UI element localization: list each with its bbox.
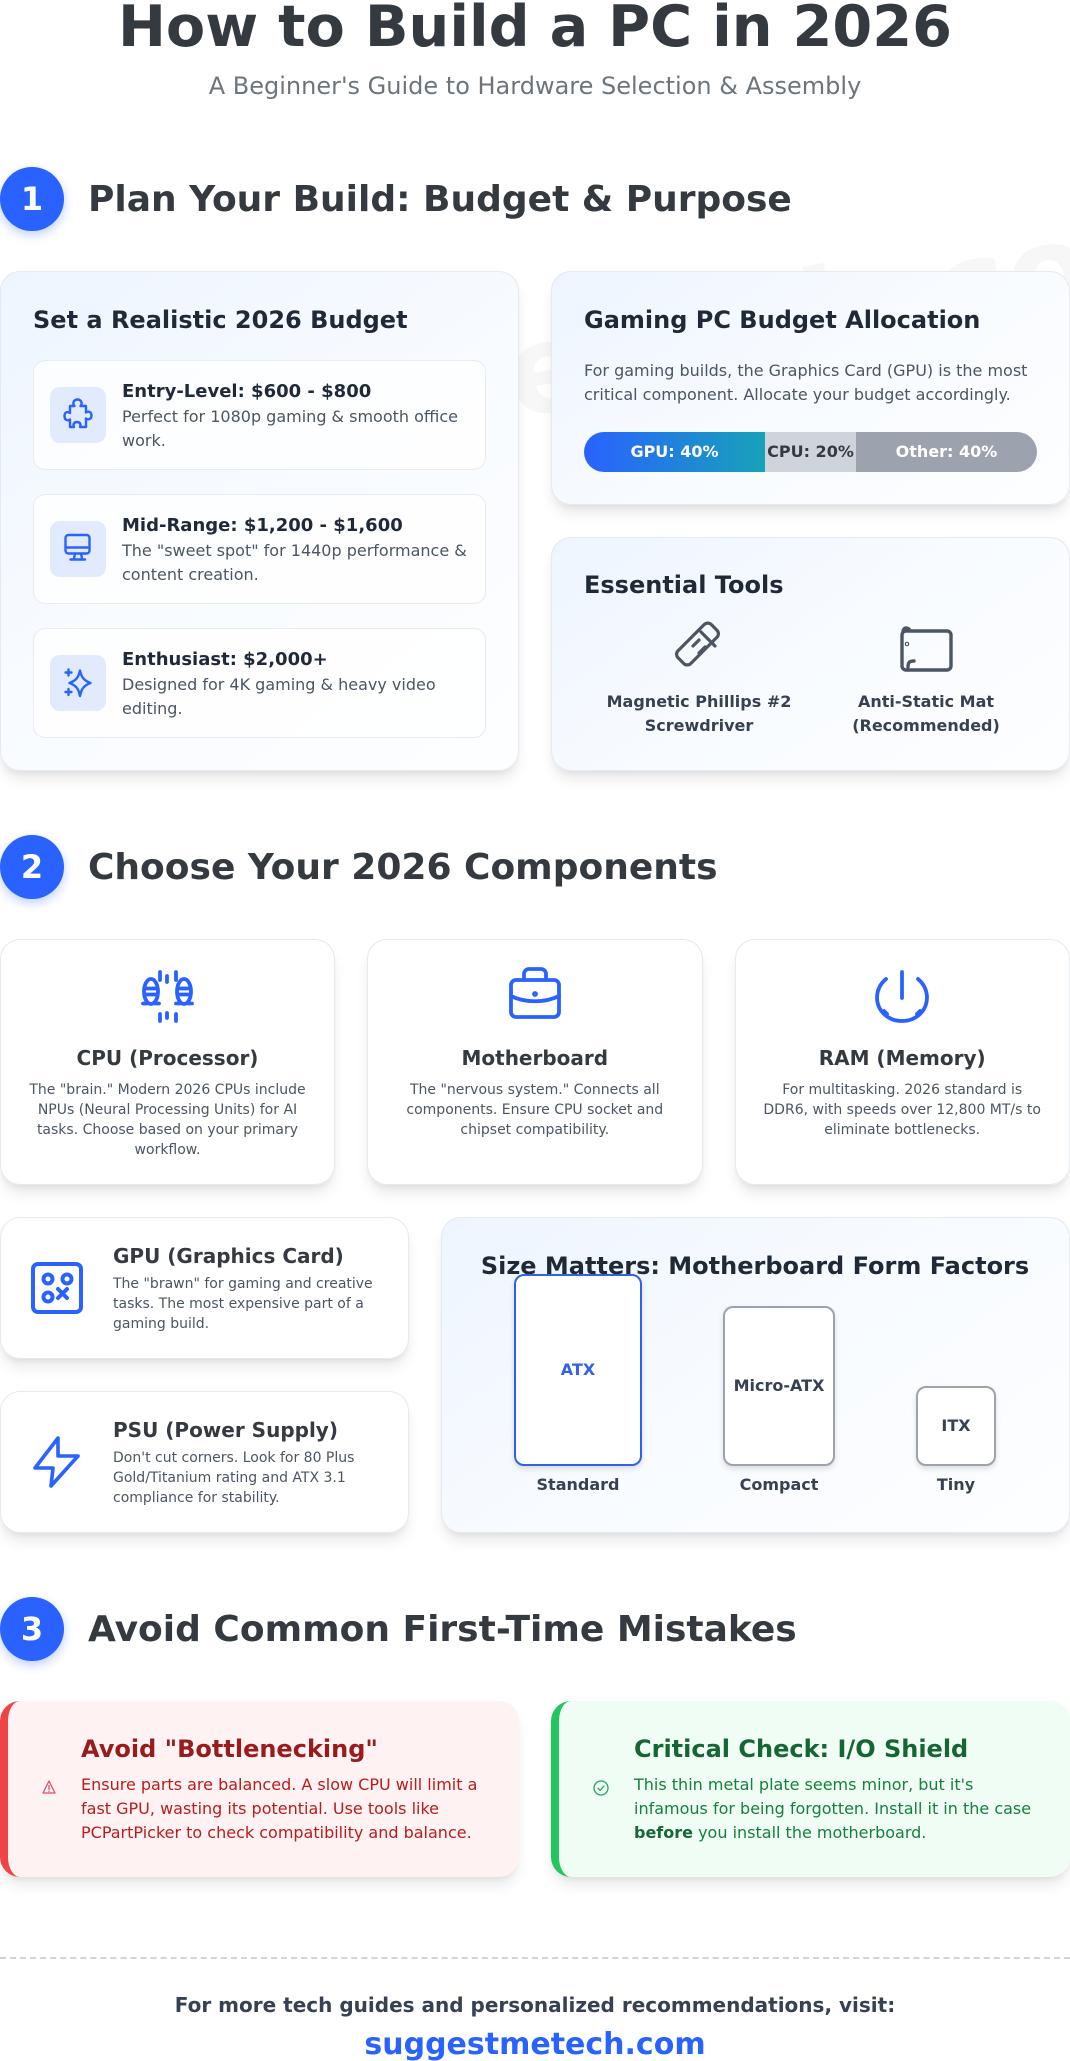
component card: RAM [735, 939, 1070, 1185]
component card: motherboard [367, 939, 703, 1185]
panel: gaming budget allocation [551, 271, 1070, 505]
tier description: Perfect for 1080p gaming & smooth office [122, 407, 458, 426]
subtitle: A Beginner's Guide to Hardware Selection & Assembly [209, 72, 861, 100]
component description [112, 1276, 373, 1332]
form factor: ATX: ATX [561, 1360, 595, 1379]
component description: tasks. The most expensive part of a [113, 1296, 364, 1312]
panel heading: Gaming PC Budget Allocation [584, 306, 980, 334]
tier description [122, 407, 458, 450]
tier title: Mid-Range: $1,200 - $1,600 [122, 515, 403, 536]
callout text [634, 1775, 1031, 1842]
tier: mid-range [33, 494, 486, 604]
tier description [122, 675, 436, 718]
tier: entry-level [33, 360, 486, 470]
tier description: content creation. [122, 565, 259, 584]
section number 1: 1 [21, 180, 43, 218]
callout text [81, 1775, 477, 1842]
segment: other 40% [856, 432, 1037, 472]
description [584, 361, 1027, 404]
component description: NPUs (Neural Processing Units) for AI [38, 1102, 297, 1118]
icon: puzzle [50, 387, 106, 443]
component description: components. Ensure CPU socket and [406, 1102, 663, 1118]
component name: CPU (Processor) [77, 1046, 258, 1070]
component card: CPU [0, 939, 335, 1185]
component description: The "nervous system." Connects all [410, 1082, 660, 1098]
label: compact: Compact [740, 1475, 818, 1494]
component name: RAM (Memory) [819, 1046, 986, 1070]
label: standard: Standard [537, 1475, 619, 1494]
component description: eliminate bottlenecks. [824, 1122, 980, 1138]
tool label: Screwdriver [645, 716, 753, 735]
tool label: Anti-Static Mat [858, 692, 994, 711]
tool label [607, 692, 791, 735]
component description: Don't cut corners. Look for 80 Plus [113, 1450, 354, 1466]
icon: monitor [50, 521, 106, 577]
segment: CPU 20% [765, 432, 856, 472]
form factor: ATX [514, 1274, 642, 1466]
component description [763, 1082, 1041, 1138]
section heading 1: Plan Your Build: Budget & Purpose [88, 179, 792, 220]
tier description: The "sweet spot" for 1440p performance & [122, 541, 467, 560]
callout text: before you install the motherboard. [634, 1823, 926, 1842]
section number 1 [0, 167, 64, 231]
section number 2: 2 [21, 848, 43, 886]
icon: sparkles [50, 655, 106, 711]
tier title: Entry-Level: $600 - $800 [122, 381, 371, 402]
icon: GPU [31, 1262, 83, 1314]
component description: workflow. [135, 1142, 200, 1158]
tier: enthusiast [33, 628, 486, 738]
tier description: editing. [122, 699, 183, 718]
component description: DDR6, with speeds over 12,800 MT/s to [763, 1102, 1041, 1118]
callout heading: Critical Check: I/O Shield [634, 1735, 968, 1763]
segment: CPU 20%: CPU: 20% [767, 442, 854, 461]
component description [406, 1082, 663, 1138]
tier title: Enthusiast: $2,000+ [122, 649, 328, 670]
panel: essential tools [551, 537, 1070, 771]
component description: compliance for stability. [113, 1490, 280, 1506]
component description: The "brain." Modern 2026 CPUs include [29, 1082, 306, 1098]
icon: screwdriver [675, 622, 720, 666]
icon: power [875, 970, 929, 1023]
icon: briefcase [509, 967, 561, 1019]
tier description: work. [122, 431, 166, 450]
description: For gaming builds, the Graphics Card (GPU) is the most [584, 361, 1027, 380]
tool label [852, 692, 1000, 735]
callout text: infamous for being forgotten. Install it in the case [634, 1799, 1031, 1818]
panel heading: Set a Realistic 2026 Budget [33, 306, 408, 334]
callout: I/O shield check [551, 1701, 1070, 1877]
icon: anti-static mat [900, 626, 953, 672]
description: critical component. Allocate your budget accordingly. [584, 385, 1011, 404]
tool label: Magnetic Phillips #2 [607, 692, 791, 711]
segment: other 40%: Other: 40% [896, 442, 997, 461]
panel heading: Essential Tools [584, 571, 783, 599]
component name: GPU (Graphics Card) [113, 1244, 344, 1268]
tier description: Designed for 4K gaming & heavy video [122, 675, 436, 694]
callout: bottlenecking warning [0, 1701, 519, 1877]
component name: PSU (Power Supply) [113, 1418, 338, 1442]
form factor: Micro-ATX [723, 1306, 835, 1466]
callout text: PCPartPicker to check compatibility and balance. [81, 1823, 472, 1842]
icon: lightning bolt [33, 1436, 80, 1488]
section number 3 [0, 1597, 64, 1661]
callout text: This thin metal plate seems minor, but it's [634, 1775, 973, 1794]
icon: check circle [593, 1780, 609, 1796]
footer link: suggestmetech.com [364, 2027, 706, 2061]
component name: Motherboard [461, 1046, 608, 1070]
footer text: For more tech guides and personalized recommendations, visit: [175, 1993, 895, 2017]
component description: Gold/Titanium rating and ATX 3.1 [113, 1470, 346, 1486]
section heading 2: Choose Your 2026 Components [88, 847, 718, 888]
form factor: ITX: ITX [941, 1416, 971, 1435]
component description: The "brawn" for gaming and creative [113, 1276, 373, 1292]
tier description [122, 541, 467, 584]
icon: CPU [141, 970, 194, 1023]
stacked bar chart [584, 432, 1037, 472]
component description: chipset compatibility. [460, 1122, 609, 1138]
segment: GPU 40% [584, 432, 765, 472]
panel heading: Size Matters: Motherboard Form Factors [481, 1252, 1029, 1280]
component description: tasks. Choose based on your primary [37, 1122, 298, 1138]
footer divider [0, 1957, 1070, 1959]
callout text: fast GPU, wasting its potential. Use tools like [81, 1799, 439, 1818]
component description [29, 1082, 306, 1158]
section number 2 [0, 835, 64, 899]
component description [113, 1450, 354, 1506]
component card: PSU [0, 1391, 409, 1533]
icon: warning triangle [42, 1780, 56, 1794]
component card: GPU [0, 1217, 409, 1359]
form factor: Micro-ATX: Micro-ATX [734, 1376, 824, 1395]
tool label: (Recommended) [852, 716, 1000, 735]
form factor: ITX [916, 1386, 996, 1466]
section heading 3: Avoid Common First-Time Mistakes [88, 1609, 797, 1650]
callout text: Ensure parts are balanced. A slow CPU will limit a [81, 1775, 477, 1794]
component description: gaming build. [113, 1316, 209, 1332]
panel: budget tiers [0, 271, 519, 771]
panel: motherboard form factors [441, 1217, 1070, 1533]
component description: For multitasking. 2026 standard is [782, 1082, 1022, 1098]
section number 3: 3 [21, 1610, 43, 1648]
segment: GPU 40%: GPU: 40% [630, 442, 719, 461]
label: tiny: Tiny [937, 1475, 975, 1494]
callout heading: Avoid "Bottlenecking" [81, 1735, 378, 1763]
